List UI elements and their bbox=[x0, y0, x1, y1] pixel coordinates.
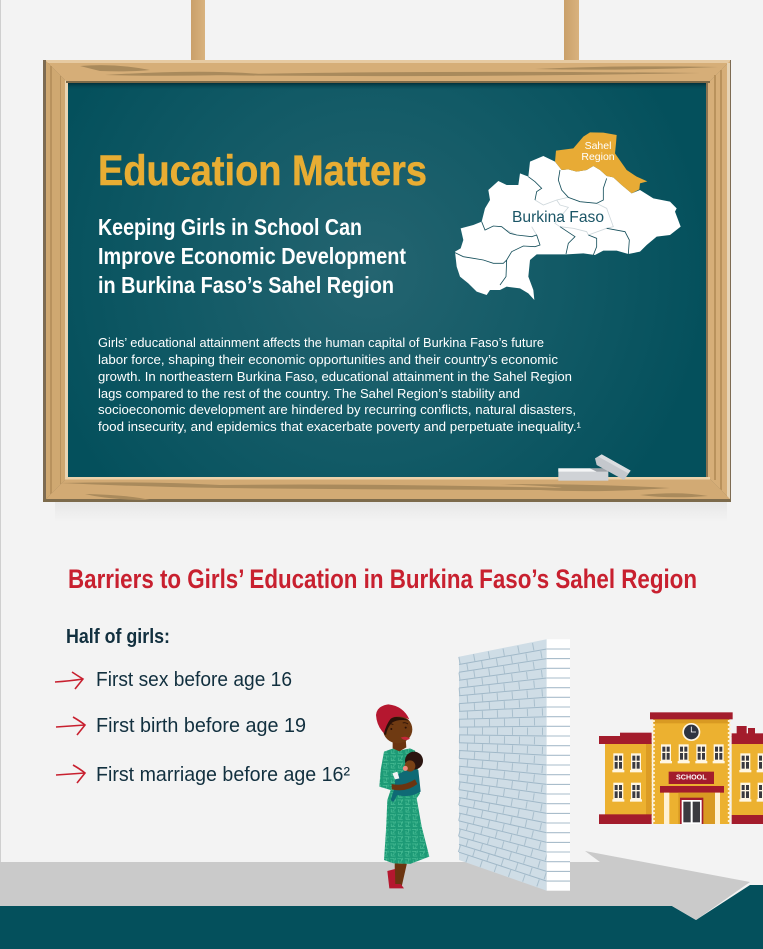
wall end face bbox=[547, 639, 570, 891]
subtitle: Improve Economic Development bbox=[98, 243, 406, 269]
subheading: half of girls: Half of girls: bbox=[66, 626, 170, 648]
illustration: school building bbox=[599, 712, 763, 824]
map label: Burkina Faso: Burkina Faso bbox=[512, 209, 604, 226]
illustration: mother holding baby bbox=[376, 704, 429, 888]
chalkboard shadow bbox=[55, 500, 727, 522]
brick wall bbox=[459, 639, 570, 891]
chalkboard panel bbox=[43, 60, 731, 502]
map label: Sahel Region bbox=[581, 140, 615, 163]
map regions bbox=[455, 156, 681, 300]
central tower bbox=[650, 712, 733, 824]
subtitle bbox=[98, 214, 406, 298]
wall face bbox=[459, 639, 547, 891]
item: first birth: First birth before age 19 bbox=[96, 715, 306, 737]
central tower: SCHOOL bbox=[676, 775, 707, 782]
map of Burkina Faso bbox=[455, 132, 681, 300]
face bbox=[383, 715, 412, 743]
baby bbox=[391, 752, 423, 802]
right wing bbox=[732, 726, 763, 824]
board surface bbox=[68, 83, 706, 477]
intro paragraph: labor force, shaping their economic opportunities and their country’s economic bbox=[98, 352, 559, 367]
intro paragraph: lags compared to the rest of the country. The Sahel Region’s stability and bbox=[98, 386, 520, 401]
map label: Sahel Region: Region bbox=[581, 151, 615, 163]
intro paragraph: growth. In northeastern Burkina Faso, educational attainment in the Sahel Region bbox=[98, 369, 572, 384]
dress bbox=[379, 748, 429, 864]
grey ground with arrow tip bbox=[0, 851, 750, 920]
map label: Sahel Region: Sahel bbox=[585, 140, 611, 152]
neck bbox=[393, 738, 406, 751]
barrier list bbox=[55, 669, 350, 786]
title: Education Matters bbox=[98, 147, 427, 195]
intro paragraph: food insecurity, and epidemics that exacerbate poverty and perpetuate inequality.¹ bbox=[98, 419, 582, 434]
intro paragraph: socioeconomic development are hindered by recurring conflicts, natural disasters, bbox=[98, 402, 576, 417]
intro paragraph: Girls’ educational attainment affects the human capital of Burkina Faso’s future bbox=[98, 335, 544, 350]
wooden frame bbox=[43, 60, 731, 502]
item: first sex: First sex before age 16 bbox=[96, 669, 292, 691]
left wing bbox=[599, 733, 652, 824]
icon: chalk erasers bbox=[558, 454, 631, 481]
legs and shoes bbox=[387, 862, 407, 888]
Sahel region highlight bbox=[555, 132, 647, 193]
hanging ropes bbox=[191, 0, 579, 61]
mother's arm bbox=[392, 779, 417, 790]
hairline bbox=[384, 717, 409, 735]
item: first marriage: First marriage before age 16² bbox=[96, 764, 350, 786]
teal footer band bbox=[0, 885, 763, 949]
head wrap bbox=[376, 704, 409, 733]
intro paragraph bbox=[98, 335, 582, 434]
subtitle: in Burkina Faso’s Sahel Region bbox=[98, 272, 394, 298]
subtitle: Keeping Girls in School Can bbox=[98, 214, 362, 240]
